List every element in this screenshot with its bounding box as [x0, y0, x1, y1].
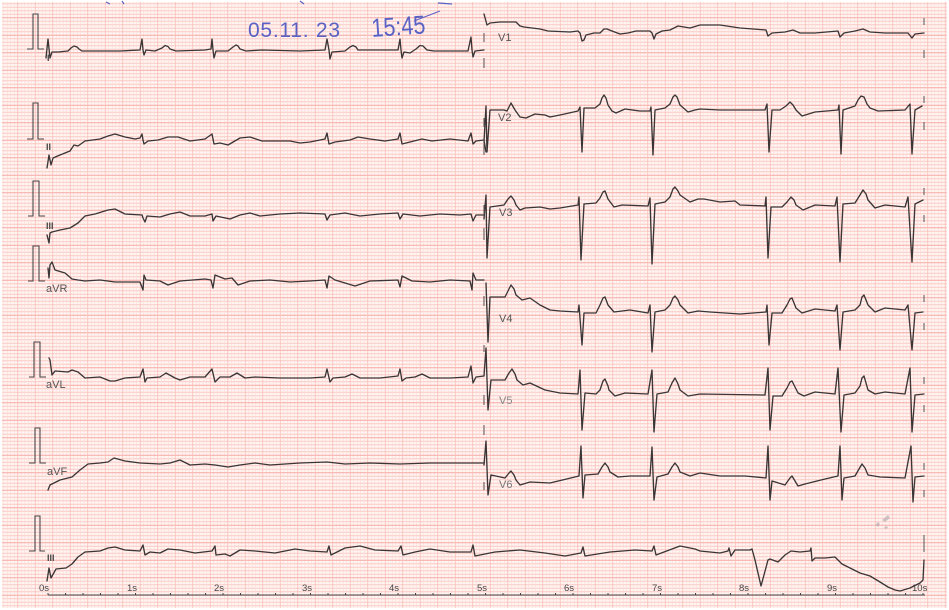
trace: lead aVF	[48, 458, 484, 490]
axis labels: 6s	[564, 583, 574, 594]
lead V2	[484, 95, 922, 155]
calibration pulse: rhythm strip	[29, 516, 45, 551]
calibration pulse: lead aVF	[29, 428, 46, 463]
axis labels	[39, 583, 928, 594]
lead label: V3: V3	[499, 207, 512, 219]
trace: lead V1	[484, 14, 924, 41]
lead III	[28, 181, 484, 243]
trace: lead V4	[486, 283, 923, 352]
lead separator dashes	[484, 18, 924, 552]
lead label: V6: V6	[499, 479, 512, 491]
trace: lead aVR	[48, 262, 484, 290]
trace: lead I	[46, 37, 484, 59]
trace: lead V5	[484, 348, 924, 432]
lead V4	[486, 283, 923, 352]
trace: rhythm strip	[47, 545, 924, 591]
axis labels: 8s	[739, 583, 749, 594]
trace: lead II	[47, 133, 486, 168]
trace: lead V6	[484, 441, 924, 502]
paper smudge	[875, 515, 890, 529]
lead label: V5: V5	[499, 395, 512, 407]
lead label: III: III	[46, 221, 54, 231]
lead aVF	[29, 428, 484, 490]
trace: lead aVL	[49, 358, 484, 383]
lead I	[27, 14, 484, 63]
lead aVR	[28, 246, 484, 295]
axis labels: 3s	[302, 583, 312, 594]
lead label: aVL: aVL	[46, 379, 66, 391]
handwritten date and time: 15:45	[370, 9, 426, 43]
lead V1	[484, 14, 924, 44]
axis labels: 1s	[127, 583, 137, 594]
calibration pulse: lead III	[28, 181, 45, 216]
lead V5	[484, 348, 924, 432]
axis labels: 4s	[389, 583, 399, 594]
axis line with ticks	[48, 593, 925, 595]
lead label: V4: V4	[499, 313, 512, 325]
calibration pulse: lead aVL	[29, 342, 46, 377]
lead II	[27, 103, 486, 168]
axis labels: 9s	[827, 583, 837, 594]
axis labels: 7s	[652, 583, 662, 594]
trace: lead V2	[484, 95, 922, 155]
calibration pulse: lead II	[27, 103, 44, 139]
time axis	[39, 583, 928, 595]
trace: lead III	[47, 209, 484, 243]
lead V6	[484, 441, 924, 502]
lead label: aVR: aVR	[46, 283, 67, 295]
lead label: V2: V2	[498, 112, 511, 124]
handwritten date and time	[106, 1, 452, 43]
axis labels: 0s	[39, 583, 49, 594]
handwritten date and time: 05.11. 23	[248, 19, 340, 42]
axis labels: 10s	[912, 583, 928, 594]
calibration pulse: lead aVR	[28, 246, 45, 281]
calibration pulse: lead I	[27, 14, 44, 49]
rhythm strip	[29, 516, 924, 591]
axis labels: 2s	[214, 583, 224, 594]
lead label: I: I	[47, 53, 50, 63]
axis labels: 5s	[477, 583, 487, 594]
lead label: rhythm strip: III	[47, 553, 55, 563]
lead label: V1: V1	[498, 32, 511, 44]
lead label: II: II	[46, 142, 51, 152]
lead aVL	[29, 342, 484, 391]
lead label: aVF: aVF	[47, 466, 67, 478]
lead V3	[484, 187, 923, 264]
trace: lead V3	[484, 187, 923, 264]
